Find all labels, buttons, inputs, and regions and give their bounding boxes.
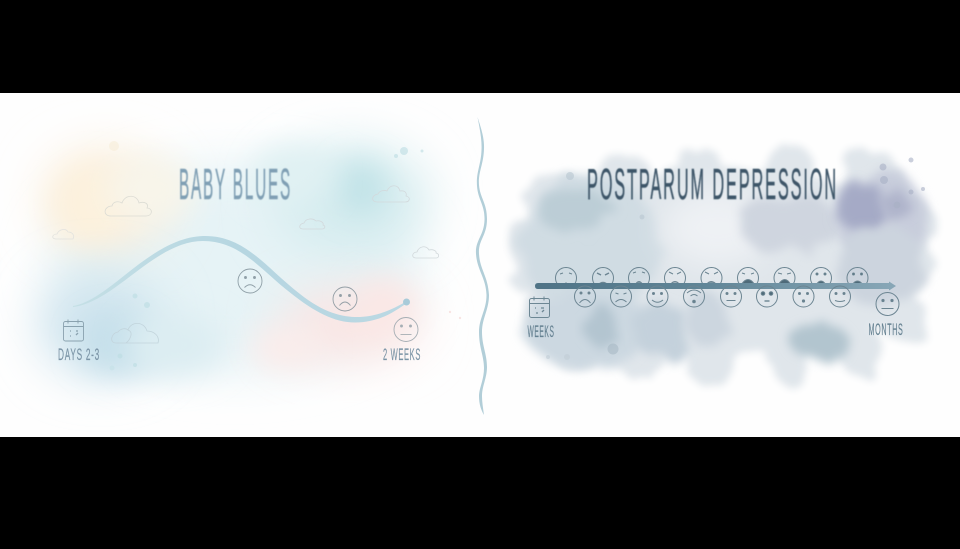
icon: sad face 1 bbox=[238, 269, 262, 293]
icon: neutral face end bbox=[876, 292, 899, 316]
divider: wavy line bbox=[476, 117, 489, 415]
icon: face top 5 bbox=[701, 268, 722, 288]
icon: face bottom 1 bbox=[574, 286, 596, 307]
icon: cloud 6 bbox=[112, 323, 158, 343]
icon: cloud 2 bbox=[53, 230, 74, 239]
icon: calendar right bbox=[530, 296, 550, 318]
icon: cloud 4 bbox=[373, 186, 409, 202]
panel: postpartum depression: WEEKS bbox=[528, 323, 554, 341]
faces: top row bbox=[556, 268, 868, 288]
icon: face top 1 bbox=[556, 268, 576, 288]
icon: calendar left bbox=[64, 320, 84, 341]
icon: cloud 3 bbox=[300, 219, 325, 229]
paint splatter: postpartum bbox=[546, 158, 925, 360]
icon: cloud 1 bbox=[105, 196, 151, 216]
white content band bbox=[0, 93, 960, 437]
icon: face bottom 7 bbox=[793, 286, 814, 307]
panel: postpartum depression: MONTHS bbox=[868, 321, 904, 339]
cloud icons bbox=[53, 186, 439, 343]
panel: baby blues bbox=[38, 141, 461, 377]
faces: bottom row bbox=[574, 286, 899, 316]
icon: face bottom 2 bbox=[610, 286, 632, 307]
icon: face top 8 bbox=[810, 268, 832, 288]
icon: face bottom 4 bbox=[684, 286, 704, 307]
icon: sad face 2 bbox=[333, 287, 357, 311]
icon: face bottom 6 bbox=[756, 286, 778, 307]
paint splatter: baby blues bbox=[109, 141, 461, 370]
icon: face bottom 3 bbox=[647, 286, 668, 307]
icon: face top 3 bbox=[628, 268, 650, 288]
icon: face top 6 bbox=[738, 268, 758, 288]
icon: face bottom 5 bbox=[720, 286, 742, 307]
panel: baby blues: BABY BLUES bbox=[179, 160, 292, 209]
icon: neutral face bbox=[394, 318, 418, 342]
watercolor wash: baby blues bbox=[38, 144, 430, 377]
panel: baby blues: DAYS 2-3 bbox=[58, 345, 100, 364]
watercolor wash: postpartum bbox=[510, 144, 936, 386]
panel: baby blues: 2 WEEKS bbox=[383, 345, 421, 364]
icon: face bottom 8 bbox=[830, 286, 850, 307]
icon: face top 2 bbox=[592, 268, 614, 288]
arrow: timeline bbox=[535, 282, 896, 290]
panel: postpartum depression bbox=[510, 144, 936, 386]
icon: face top 9 bbox=[847, 268, 868, 288]
curve: mood over time bbox=[73, 236, 410, 322]
icon: face top 4 bbox=[664, 268, 686, 288]
icon: face top 7 bbox=[774, 268, 795, 288]
icon: cloud 5 bbox=[413, 247, 439, 258]
